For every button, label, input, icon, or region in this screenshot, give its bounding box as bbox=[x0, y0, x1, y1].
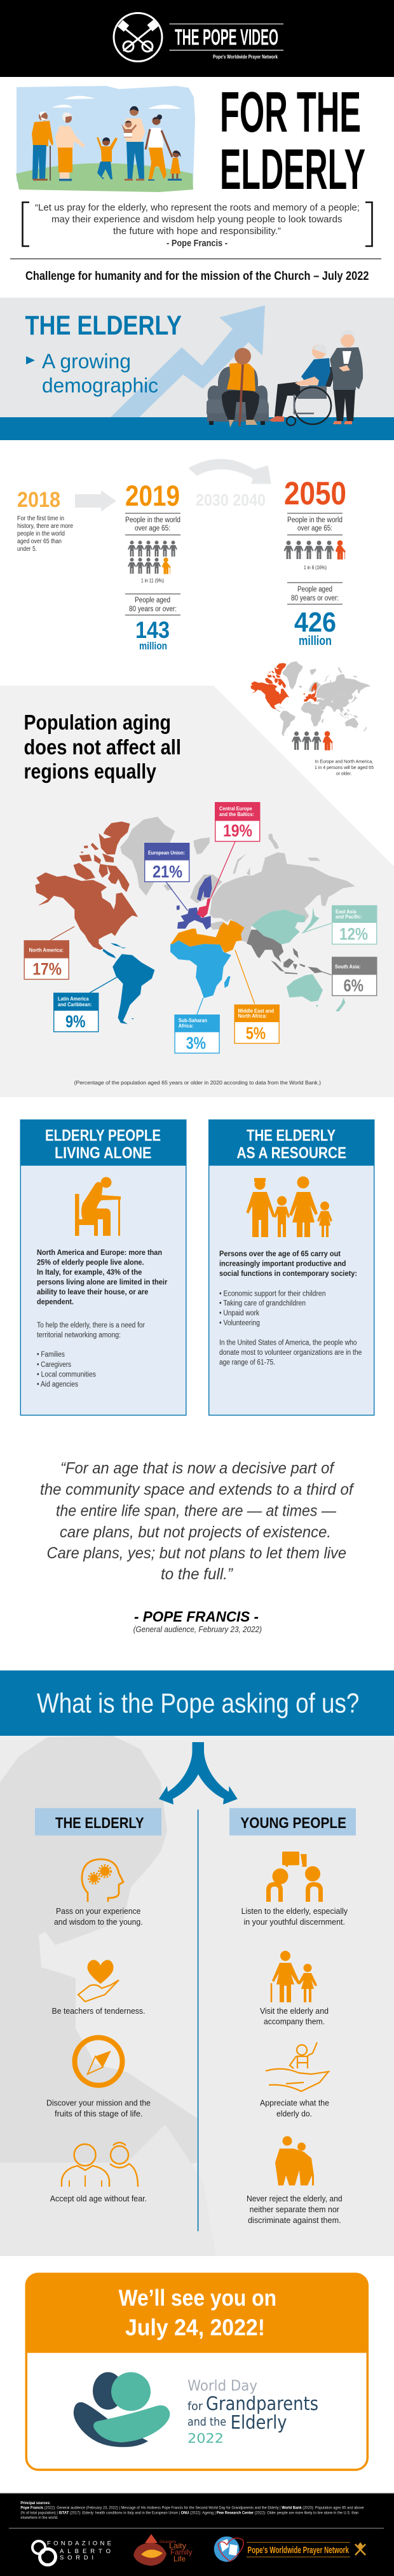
icon: seated elderly person with cane bbox=[75, 1177, 121, 1236]
pictogram: 1 in 6 bbox=[283, 541, 345, 559]
item: discover mission: Discover your mission and the bbox=[46, 2098, 151, 2108]
pull quote: Pope Francis bbox=[40, 1460, 355, 1634]
background: head silhouette bbox=[0, 1736, 394, 2256]
text: roles list: • Unpaid work bbox=[219, 1310, 259, 1317]
footer bbox=[0, 2493, 394, 2576]
text: alone statistics bbox=[37, 1248, 167, 1306]
callout: Latin America and Caribbean bbox=[53, 977, 117, 1032]
callout: Middle East and North Africa: 5% bbox=[246, 1024, 266, 1043]
callout: European Union bbox=[144, 843, 189, 911]
callout: East Asia and Pacific: East Asia bbox=[336, 908, 357, 915]
item: never reject the elderly: neither separate them nor bbox=[250, 2205, 339, 2214]
pull quote: Pope Francis: the community space and extends to a third of bbox=[40, 1481, 355, 1499]
heading: population aging: regions equally bbox=[24, 759, 157, 783]
callout: Sub-Saharan Africa bbox=[174, 998, 220, 1053]
item: discover mission: fruits of this stage of life. bbox=[55, 2109, 143, 2118]
item: never reject the elderly: Never reject the elderly, and bbox=[247, 2194, 343, 2203]
text: alone statistics: persons living alone are limited in their bbox=[37, 1277, 167, 1286]
callout: East Asia and Pacific: 12% bbox=[339, 925, 368, 944]
block: 2050: over age 65: bbox=[297, 525, 332, 532]
block: 2050: People aged bbox=[297, 586, 332, 593]
block: 2019: over age 65: bbox=[135, 525, 170, 532]
illustration: man in wheelchair with carer bbox=[269, 330, 363, 426]
sources: (% of total population) | ISTAT (2017): Elderly: health conditions in Italy and in the European Union | ONU (2022): Ageing | Pew Research Center (2022): Older people are more likely to live alone in the U.S. than bbox=[20, 2510, 359, 2515]
text: productive functions: social functions in contemporary society: bbox=[219, 1269, 357, 1278]
text: productive functions bbox=[219, 1249, 357, 1278]
block: 2019: million bbox=[139, 640, 167, 652]
icon: crossed keys logo bbox=[114, 13, 162, 61]
callout: European Union: European Union: bbox=[148, 850, 185, 856]
text: roles list: donate most to volunteer organizations are in the bbox=[219, 1349, 362, 1357]
callout: Sub-Saharan Africa: Africa: bbox=[179, 1022, 193, 1028]
callout: 1 in 4 in Europe and North America: or older. bbox=[336, 771, 352, 777]
item: accept old age bbox=[50, 2142, 147, 2203]
pull quote: Pope Francis: care plans, but not projects of existence. bbox=[60, 1523, 331, 1541]
logo wordmark: Pope's Worldwide Prayer Network bbox=[213, 53, 278, 60]
callout: North America bbox=[24, 927, 74, 980]
text: territorial networking: • Aid agencies bbox=[37, 1381, 78, 1388]
item: listen to the elderly: in your youthful discernment. bbox=[244, 1917, 345, 1927]
pull quote: Pope Francis: (General audience, February 23, 2022) bbox=[133, 1625, 262, 1634]
logo wordmark: THE POPE VIDEO bbox=[175, 25, 278, 50]
heading: AS A RESOURCE bbox=[236, 1144, 346, 1162]
subheading: A growing bbox=[42, 350, 131, 373]
item: appreciate the elderly: elderly do. bbox=[276, 2109, 312, 2118]
callout: Latin America and Caribbean: Latin America bbox=[58, 995, 89, 1002]
callout: East Asia and Pacific bbox=[302, 905, 377, 944]
logo: Fondazione Alberto Sordi: FONDAZIONE bbox=[47, 2540, 111, 2547]
callout: Latin America and Caribbean: and Caribbean: bbox=[58, 1001, 92, 1008]
item: pass on experience: Pass on your experience bbox=[56, 1906, 140, 1916]
logo: Pope's Worldwide Prayer Network bbox=[214, 2537, 365, 2562]
block: 2019: 1 in 11 (9%) bbox=[141, 578, 164, 584]
callout: Central Europe and the Baltics: 19% bbox=[223, 821, 252, 840]
title bbox=[220, 81, 365, 202]
item: never reject the elderly: discriminate against them. bbox=[248, 2215, 341, 2225]
callout: Central Europe and the Baltics: and the Baltics: bbox=[219, 811, 254, 817]
map: world regions bbox=[35, 817, 355, 1024]
heading: population aging: does not affect all bbox=[24, 735, 181, 759]
block: 2019: 143 bbox=[135, 617, 170, 643]
item: appreciate the elderly: Appreciate what the bbox=[260, 2098, 329, 2108]
item: discover mission bbox=[46, 2038, 151, 2118]
timeline: 2030 2040 with arc arrow bbox=[188, 459, 271, 509]
item: visit the elderly: accompany them. bbox=[264, 2017, 325, 2026]
block: 2018: history, there are more bbox=[17, 522, 73, 530]
logo wordmark: World Day: Elderly bbox=[231, 2412, 287, 2434]
prayer quote: “Let us pray for the elderly, who represent the roots and memory of a people; bbox=[35, 202, 360, 213]
grandmother bbox=[55, 113, 85, 181]
father and baby bbox=[121, 106, 145, 181]
callout: South Asia: South Asia: bbox=[335, 964, 360, 970]
logo: Fondazione Alberto Sordi: ALBERTO bbox=[60, 2548, 111, 2555]
heading: THE ELDERLY bbox=[25, 310, 182, 341]
child bbox=[97, 137, 118, 179]
callout: 1 in 4 in Europe and North America: 1 in 4 persons will be aged 65 bbox=[315, 765, 374, 770]
text: territorial networking: territorial networking among: bbox=[37, 1331, 121, 1339]
block: 2019: People in the world bbox=[125, 516, 180, 524]
callout: South Asia bbox=[317, 957, 377, 995]
block: 2019: People aged bbox=[135, 597, 170, 604]
text: productive functions: increasingly important productive and bbox=[219, 1259, 346, 1268]
block: 2050: 1 in 6 (16%) bbox=[304, 565, 327, 571]
prayer quote bbox=[23, 202, 372, 249]
block: 2050: 2050 bbox=[284, 475, 346, 511]
sources: elsewhere in the world. bbox=[20, 2516, 58, 2520]
date heading: July 24, 2022! bbox=[125, 2315, 265, 2341]
callout: Sub-Saharan Africa: Sub-Saharan bbox=[179, 1017, 207, 1023]
logo: Fondazione Alberto Sordi bbox=[32, 2540, 111, 2565]
pull quote: Pope Francis: Care plans, yes; but not plans to let them live bbox=[47, 1544, 346, 1562]
subheading: demographic bbox=[42, 374, 158, 397]
block: 2018: aged over 65 than bbox=[17, 537, 62, 545]
map caption: (Percentage of the population aged 65 years or older in 2020 according to data from the World Bank.) bbox=[74, 1079, 321, 1086]
sources: Principal sources: bbox=[20, 2501, 50, 2505]
text: roles list: • Economic support for their children bbox=[219, 1290, 325, 1298]
heading: population aging: Population aging bbox=[24, 710, 171, 734]
callout: Middle East and North Africa bbox=[234, 950, 280, 1043]
prayer quote: the future with hope and responsibility.” bbox=[113, 226, 281, 237]
logo: Dicastery for Laity, Family and Life: Life bbox=[173, 2554, 186, 2563]
illustration: seated man in armchair bbox=[207, 348, 269, 427]
timeline: 2030 2040 with arc arrow: 2030 2040 bbox=[196, 490, 266, 509]
callout: Central Europe and the Baltics bbox=[211, 802, 260, 898]
item: visit the elderly bbox=[260, 1951, 329, 2026]
logo: Fondazione Alberto Sordi: SORDI bbox=[60, 2554, 93, 2561]
heading bbox=[45, 1127, 161, 1162]
text: alone statistics: North America and Europe: more than bbox=[37, 1248, 162, 1257]
column heading: the elderly: THE ELDERLY bbox=[55, 1815, 144, 1832]
callout: 1 in 4 in Europe and North America: In Europe and North America, bbox=[315, 758, 373, 765]
callout: Middle East and North Africa: North Africa: bbox=[238, 1013, 267, 1019]
sources: Pope Francis (2022): General audience (February 23, 2022) | Message of His Holiness Pope Francis for the Second World Day for Grandparents and the Elderly | World Bank (2020): Population ages 65 and above bbox=[20, 2506, 364, 2510]
column heading: young people: YOUNG PEOPLE bbox=[240, 1815, 346, 1832]
pull quote: Pope Francis: the entire life span, there are — at times — bbox=[56, 1502, 337, 1520]
sources bbox=[20, 2501, 364, 2520]
block: 2019: 80 years or over: bbox=[129, 606, 177, 613]
block: 2018: under 5. bbox=[17, 545, 37, 553]
item: visit the elderly: Visit the elderly and bbox=[260, 2006, 329, 2016]
column heading: the elderly bbox=[35, 1808, 161, 1836]
column heading: young people bbox=[229, 1808, 356, 1836]
date heading bbox=[119, 2285, 276, 2341]
item: pass on experience: and wisdom to the young. bbox=[54, 1917, 143, 1927]
logo: Dicastery for Laity, Family and Life bbox=[133, 2534, 192, 2566]
subheading bbox=[26, 350, 158, 397]
block: 2018: 2018 bbox=[17, 488, 60, 512]
block: 2050: 426 bbox=[294, 607, 336, 638]
timeline arrow: 2018 to 2019 bbox=[75, 490, 116, 511]
logo wordmark: World Day bbox=[187, 2378, 318, 2446]
logo: Dicastery for Laity, Family and Life: Laity bbox=[169, 2542, 186, 2551]
heading: LIVING ALONE bbox=[55, 1144, 151, 1162]
panel: World Day date bbox=[25, 2273, 369, 2470]
logo wordmark: World Day: 2022 bbox=[187, 2431, 224, 2446]
pull quote: Pope Francis: to the full.” bbox=[161, 1565, 234, 1583]
item: listen to the elderly: Listen to the elderly, especially bbox=[241, 1906, 348, 1916]
prayer quote: may their experience and wisdom help young people to look towards bbox=[51, 214, 342, 225]
girl bbox=[168, 150, 182, 181]
text: roles list: • Taking care of grandchildren bbox=[219, 1300, 306, 1308]
logo wordmark: World Day: Grandparents bbox=[206, 2393, 318, 2414]
block: 2050: 80 years or over: bbox=[291, 595, 339, 602]
text: alone statistics: ability to leave their house, or are bbox=[37, 1287, 148, 1296]
pull quote: Pope Francis: “For an age that is now a decisive part of bbox=[60, 1460, 336, 1478]
block: 2019: 2019 bbox=[125, 480, 180, 512]
prayer quote: - Pope Francis - bbox=[166, 238, 228, 249]
text: alone statistics: 25% of elderly people live alone. bbox=[37, 1257, 144, 1266]
heading: ELDERLY PEOPLE bbox=[45, 1127, 161, 1145]
text: productive functions: Persons over the age of 65 carry out bbox=[219, 1249, 341, 1258]
panel: elderly people living alone bbox=[20, 1119, 186, 1415]
logo: embrace mark bbox=[74, 2372, 170, 2447]
block: 2018 bbox=[17, 488, 73, 553]
callout: Middle East and North Africa: Middle East and bbox=[238, 1008, 274, 1014]
callout: 1 in 4 in Europe and North America bbox=[292, 731, 374, 777]
callout: North America: 17% bbox=[32, 960, 62, 979]
arrow: rising trend bbox=[111, 305, 265, 417]
illustration: family generations bbox=[16, 86, 195, 192]
mother bbox=[146, 114, 172, 181]
grandfather bbox=[32, 111, 53, 181]
block: 2050 bbox=[283, 475, 346, 648]
date heading: We’ll see you on bbox=[119, 2285, 276, 2311]
callout: East Asia and Pacific: and Pacific: bbox=[336, 913, 362, 920]
item: appreciate the elderly bbox=[260, 2042, 329, 2118]
callout: European Union: 21% bbox=[153, 862, 182, 882]
panel: what is the Pope asking bbox=[0, 1670, 394, 2256]
heading: population aging bbox=[24, 710, 181, 783]
callout: Sub-Saharan Africa: 3% bbox=[186, 1034, 206, 1053]
logo wordmark bbox=[169, 24, 283, 60]
block: 2019 bbox=[125, 480, 180, 652]
logo wordmark: World Day: for bbox=[187, 2400, 203, 2413]
panel: growing demographic bbox=[0, 298, 394, 440]
text: roles list bbox=[219, 1290, 362, 1366]
text: roles list: age range of 61-75. bbox=[219, 1359, 275, 1366]
block: 2018: For the first time in bbox=[17, 515, 64, 522]
text: territorial networking: To help the elderly, there is a need for bbox=[37, 1322, 145, 1329]
text: territorial networking: • Local communities bbox=[37, 1371, 96, 1379]
item: pass on experience bbox=[54, 1859, 143, 1927]
text: alone statistics: dependent. bbox=[37, 1297, 74, 1306]
heading: THE ELDERLY bbox=[247, 1127, 336, 1145]
block: 2018: people in the world bbox=[17, 530, 65, 537]
callout: Latin America and Caribbean: 9% bbox=[65, 1012, 85, 1031]
text: territorial networking: • Caregivers bbox=[37, 1361, 71, 1369]
item: accept old age: Accept old age without fear. bbox=[50, 2194, 147, 2203]
item: listen to the elderly bbox=[241, 1852, 348, 1927]
logo: Dicastery for Laity, Family and Life: Family bbox=[170, 2548, 192, 2557]
heading bbox=[236, 1127, 346, 1162]
text: territorial networking bbox=[37, 1322, 145, 1388]
logo: Dicastery for Laity, Family and Life: Dicastery bbox=[160, 2540, 176, 2544]
logo wordmark: World Day: World Day bbox=[187, 2378, 257, 2395]
arrow: forking both ways bbox=[159, 1742, 238, 1804]
callout: North America: North America: bbox=[29, 947, 64, 953]
logo wordmark: World Day: and the bbox=[187, 2415, 226, 2428]
callout: Central Europe and the Baltics: Central Europe bbox=[219, 805, 252, 812]
block: 2050: million bbox=[299, 634, 332, 648]
text: territorial networking: • Families bbox=[37, 1351, 65, 1359]
panel: regions background bbox=[0, 686, 394, 1097]
pull quote: Pope Francis: - POPE FRANCIS - bbox=[134, 1608, 259, 1624]
text: alone statistics: In Italy, for example, 43% of the bbox=[37, 1268, 142, 1277]
icon: family group bbox=[247, 1177, 332, 1237]
text: roles list: In the United States of America, the people who bbox=[219, 1340, 357, 1347]
block: 2050: People in the world bbox=[287, 516, 343, 524]
map: Europe and North America highlighted bbox=[250, 661, 370, 736]
item: never reject the elderly bbox=[247, 2136, 343, 2225]
item: teachers of tenderness bbox=[52, 1960, 145, 2016]
panel: the elderly as a resource bbox=[208, 1119, 374, 1415]
text: roles list: • Volunteering bbox=[219, 1319, 260, 1327]
header bar bbox=[0, 0, 394, 77]
item: teachers of tenderness: Be teachers of tenderness. bbox=[52, 2006, 145, 2016]
callout: South Asia: 6% bbox=[343, 976, 363, 995]
pictogram: 1 in 11 bbox=[128, 541, 177, 574]
